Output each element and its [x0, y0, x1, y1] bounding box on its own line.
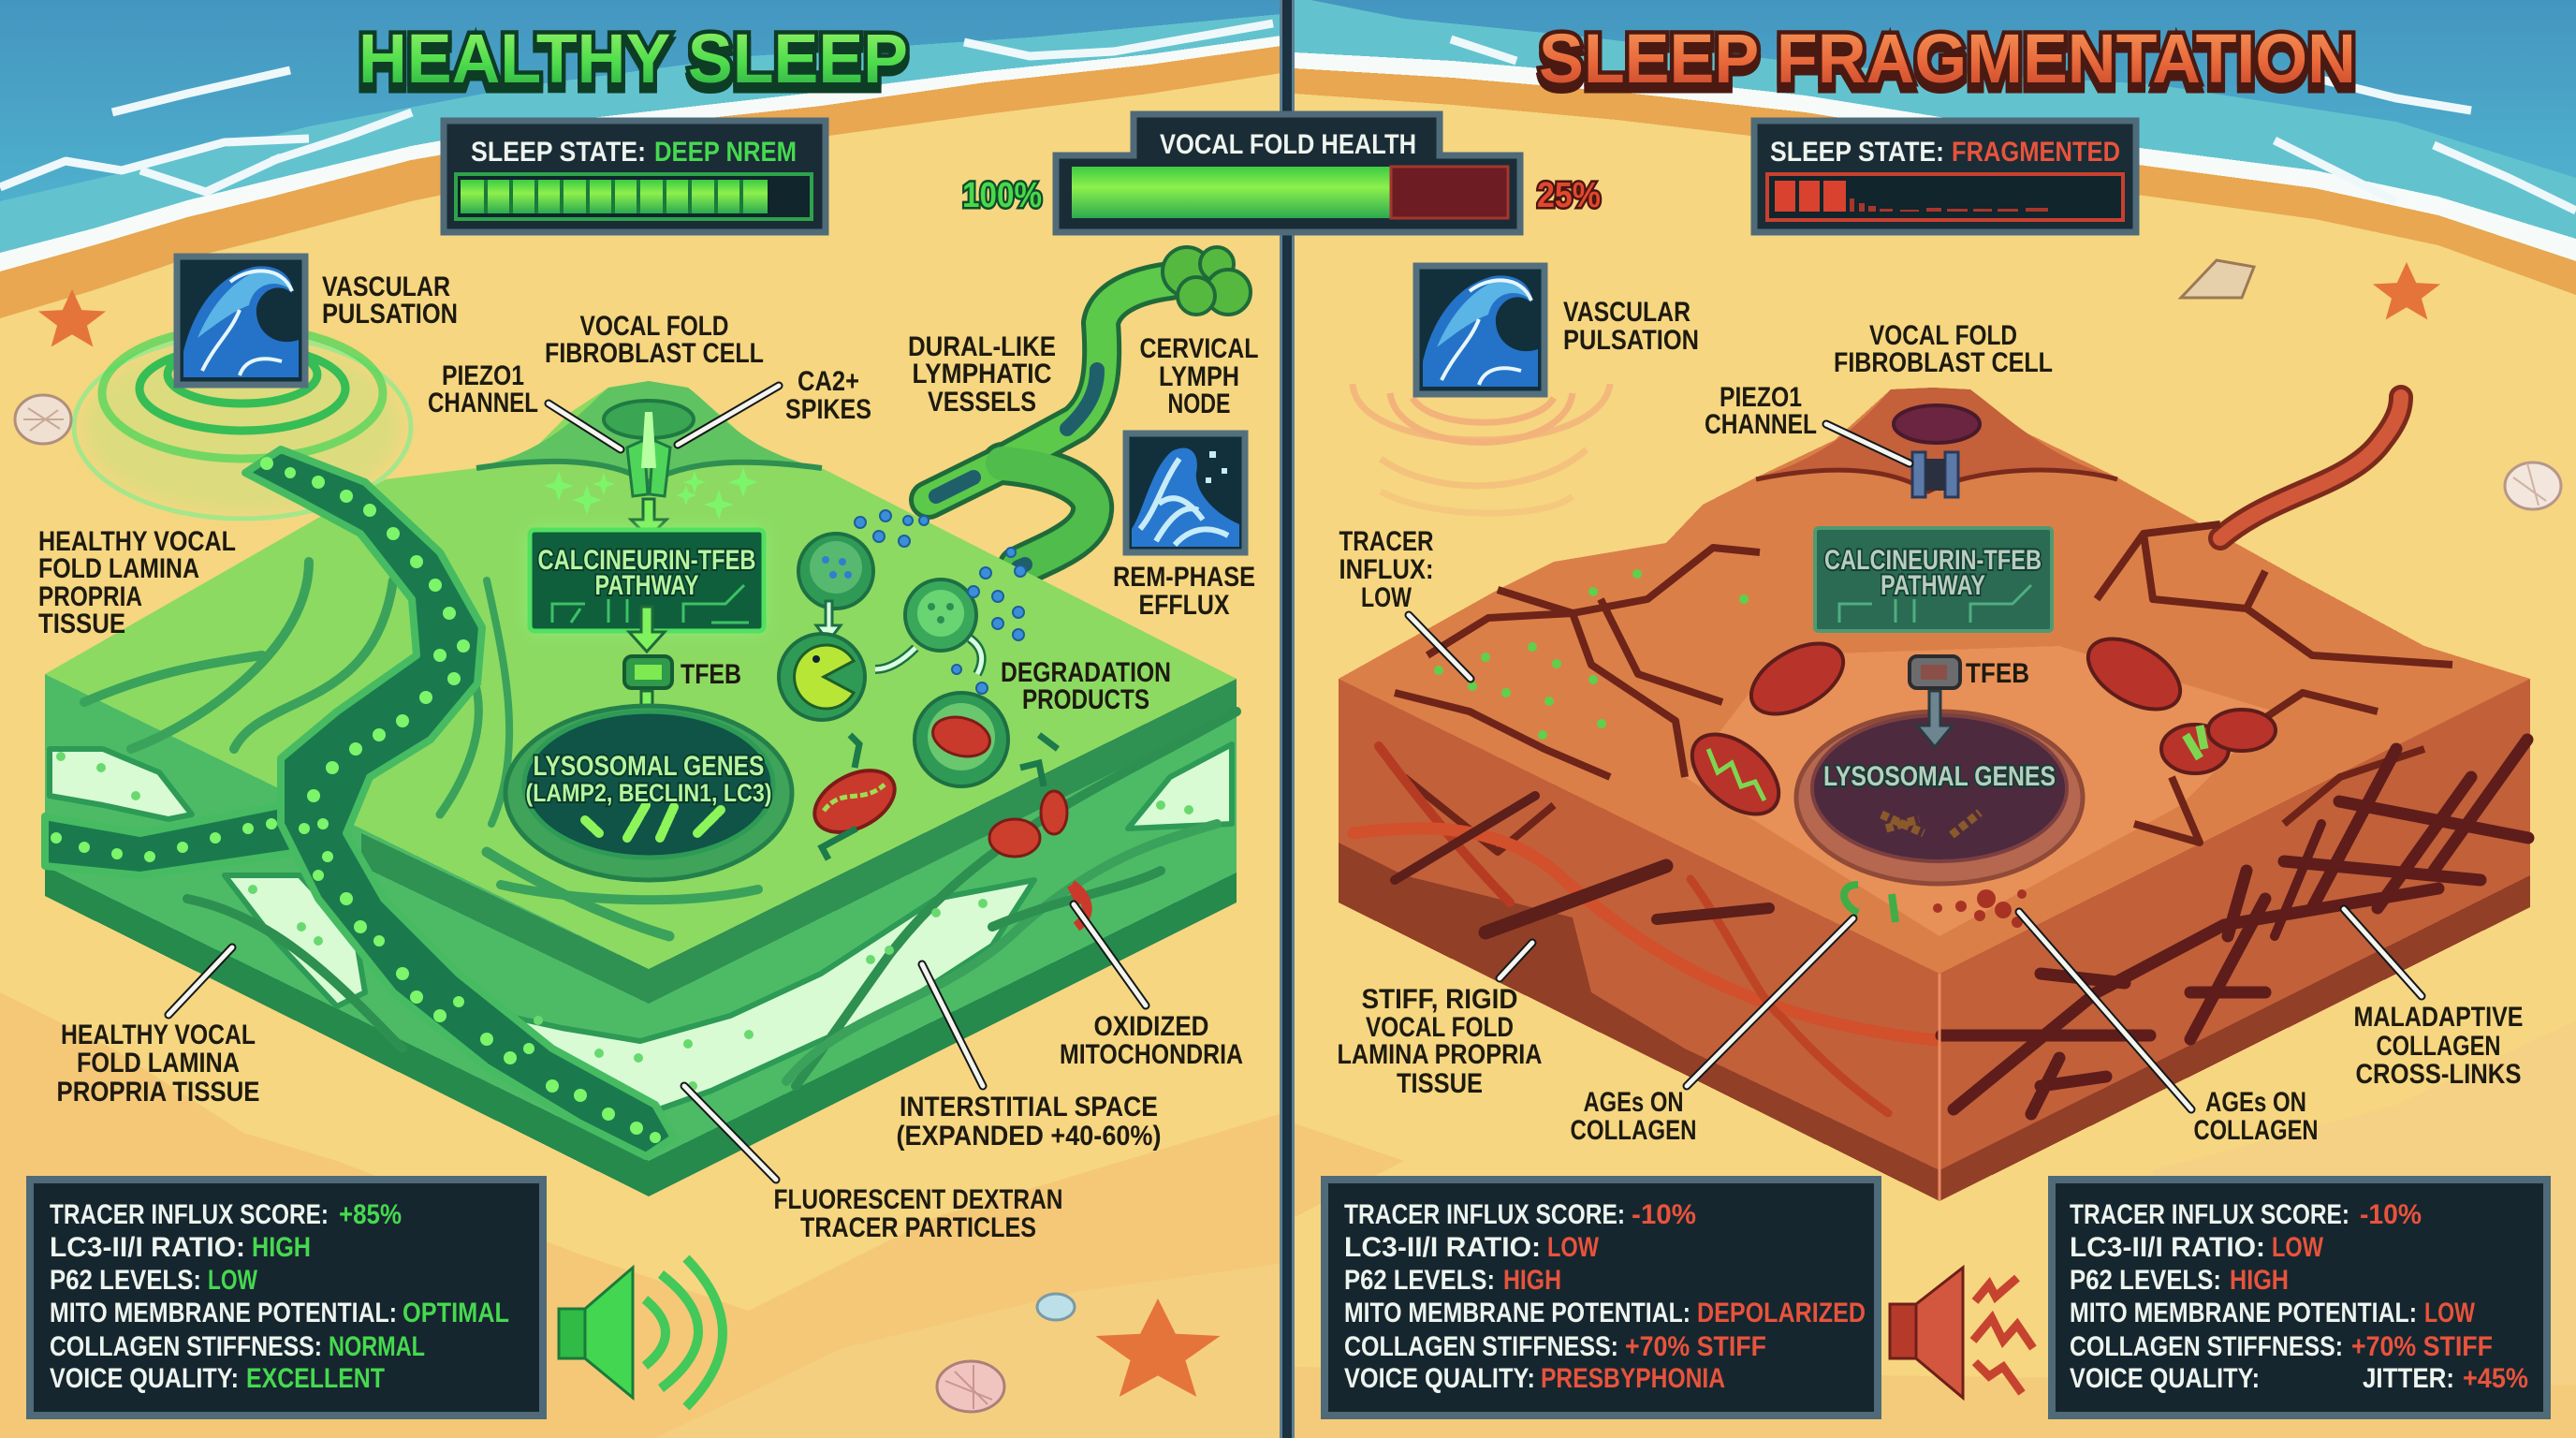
label: degradation products	[1001, 657, 1171, 715]
lysosome nucleus healthy	[505, 706, 792, 880]
label: interstitial space: INTERSTITIAL SPACE	[900, 1092, 1158, 1123]
label: vascular pulsation healthy: VASCULAR	[322, 271, 450, 302]
leader lines healthy	[168, 386, 1146, 1180]
background: ocean foam streaks left	[0, 23, 1273, 192]
label: cervical lymph node: LYMPH	[1159, 361, 1239, 392]
label: healthy vocal fold lamina propria tissue lower: HEALTHY VOCAL	[61, 1020, 256, 1050]
ca2+ sparkles	[544, 467, 758, 520]
interstitial lagoon bottom	[50, 744, 1232, 1114]
stat: voice quality and jitter: VOICE QUALITY:	[2070, 1363, 2260, 1394]
wave shape	[183, 266, 299, 377]
label: ages on collagen left: AGEs ON	[1584, 1087, 1683, 1118]
label: pathway: PATHWAY	[1881, 570, 1985, 601]
leader lines fragmented	[1409, 424, 2422, 1109]
label: piezo1 channel healthy: CHANNEL	[428, 388, 538, 418]
fibroblast nucleus	[604, 401, 694, 438]
stat: tracer influx: +85%	[339, 1199, 402, 1230]
pacman lysosome	[779, 634, 865, 720]
label: stiff rigid tissue: STIFF, RIGID	[1361, 984, 1518, 1015]
autophagy vesicle 2	[905, 580, 976, 651]
stat: lc3 ratio: LC3-II/I RATIO:	[1344, 1232, 1541, 1263]
surface cracks	[1395, 524, 2452, 852]
label: lysosomal genes fragmented: LYSOSOMAL GENES	[1823, 761, 2056, 792]
stat: mito membrane potential: MITO MEMBRANE POTENTIAL:	[2070, 1298, 2417, 1328]
cervical lymph node	[1163, 247, 1251, 315]
health bar	[1072, 167, 1508, 218]
ripple rings: fragmented vascular pulsation	[1353, 384, 1610, 513]
label: fluorescent dextran tracer particles	[773, 1184, 1063, 1243]
circuit traces	[552, 585, 749, 623]
label: cervical lymph node	[1140, 333, 1258, 419]
panel: sleep state healthy	[444, 121, 826, 232]
slab: fragmented tissue block	[1339, 388, 2530, 1201]
title: sleep fragmentation: SLEEP FRAGMENTATION	[1539, 20, 2356, 97]
oxidized mitochondria in wall	[1072, 885, 1087, 927]
label: rem-phase efflux: REM-PHASE	[1113, 562, 1255, 593]
label: vocal fold fibroblast cell fragmented: VOCAL FOLD	[1869, 320, 2017, 351]
stat: voice quality: PRESBYPHONIA	[1541, 1363, 1725, 1394]
panel: vocal fold health	[1056, 114, 1520, 232]
background: lower sand patches	[0, 992, 2576, 1438]
arrow: channel to pathway	[631, 499, 666, 537]
tissue fibers	[84, 562, 1237, 1086]
label: maladaptive collagen cross-links: MALADAPTIVE	[2353, 1002, 2524, 1033]
stat: collagen stiffness: COLLAGEN STIFFNESS:	[1344, 1331, 1618, 1362]
drying vessel inner	[2220, 397, 2401, 538]
icon: wave vascular pulsation healthy	[177, 257, 305, 385]
icon: speaker healthy	[559, 1258, 723, 1407]
label: tracer influx low: INFLUX:	[1339, 554, 1434, 585]
label: vascular pulsation fragmented	[1563, 297, 1699, 356]
label: fluorescent dextran tracer particles: FLUORESCENT DEXTRAN	[773, 1184, 1063, 1215]
wave shape	[1132, 448, 1239, 547]
surface lighter front plate	[1685, 646, 2275, 936]
text: sleep state fragmented: SLEEP STATE:	[1770, 137, 1944, 168]
label: tracer influx low: LOW	[1361, 582, 1412, 613]
damaged mitochondria	[1677, 624, 2276, 829]
label: piezo1 channel fragmented	[1705, 382, 1817, 440]
label: stiff rigid tissue: TISSUE	[1397, 1068, 1483, 1099]
drying vessel	[2220, 397, 2401, 538]
distorted sound waves	[1973, 1278, 2033, 1393]
value: 100%: 100%	[962, 176, 1042, 215]
label: dural-like lymphatic vessels: DURAL-LIKE	[908, 331, 1056, 362]
text: sleep state deep nrem: DEEP NREM	[654, 137, 797, 168]
text: sleep state deep nrem: SLEEP STATE:	[471, 137, 646, 168]
top surface	[1339, 388, 2530, 974]
autophagosome tethers	[822, 735, 1058, 859]
label: maladaptive collagen cross-links: CROSS-LINKS	[2355, 1059, 2522, 1090]
label: pathway: PATHWAY	[595, 570, 698, 601]
wave shape	[1423, 275, 1538, 387]
label: ages on collagen right	[2194, 1087, 2318, 1146]
lagoon tracer dots	[56, 752, 1193, 1091]
label: healthy vocal fold lamina propria tissue lower: PROPRIA TISSUE	[56, 1077, 260, 1108]
decoration: starfish right	[2373, 262, 2440, 320]
ages green squiggles	[1844, 885, 1895, 922]
label: stiff rigid tissue: VOCAL FOLD	[1366, 1012, 1514, 1043]
autophagy vesicle 1	[798, 534, 873, 609]
icon: tfeb pill	[624, 656, 672, 688]
damaged mitochondria small	[989, 791, 1067, 857]
stat: collagen stiffness: NORMAL	[329, 1331, 425, 1362]
stat: mito membrane potential: OPTIMAL	[402, 1298, 509, 1328]
wave highlight	[1437, 281, 1530, 347]
label: ca2+ spikes: SPIKES	[785, 394, 871, 425]
stat: collagen stiffness: COLLAGEN STIFFNESS:	[50, 1331, 322, 1362]
label: healthy vocal fold lamina propria tissue upper: TISSUE	[38, 609, 125, 639]
label: tfeb healthy: TFEB	[681, 659, 741, 690]
ages red debris	[1933, 889, 2027, 928]
label: vocal fold fibroblast cell healthy	[545, 311, 764, 369]
label: vascular pulsation healthy	[322, 271, 458, 330]
label: vascular pulsation fragmented: PULSATION	[1563, 325, 1699, 356]
mitochondrion cristae	[1708, 749, 1764, 800]
stat: p62 levels: HIGH	[1503, 1265, 1561, 1296]
top surface	[45, 381, 1237, 969]
sparse tracer dots	[1434, 569, 1749, 740]
vessel lumen segments	[936, 370, 1097, 567]
stat: p62 levels: P62 LEVELS:	[2070, 1265, 2221, 1296]
stat: tracer influx: TRACER INFLUX SCORE:	[1344, 1199, 1625, 1230]
membrane line	[1756, 470, 2117, 492]
label: oxidized mitochondria: MITOCHONDRIA	[1060, 1039, 1243, 1070]
blue degradation particles	[855, 510, 1026, 694]
label: interstitial space: (EXPANDED +40-60%)	[897, 1121, 1161, 1152]
slab side walls	[1339, 679, 2530, 1201]
text: vocal fold health: VOCAL FOLD HEALTH	[1160, 129, 1416, 160]
stat: voice quality: EXCELLENT	[246, 1363, 385, 1394]
stat: voice quality: VOICE QUALITY:	[50, 1363, 239, 1394]
stat: lc3 ratio: LOW	[2272, 1232, 2324, 1263]
fibroblast hill	[1756, 388, 2117, 492]
arrow: tfeb to lysosomal genes	[629, 691, 665, 747]
label: degradation products: PRODUCTS	[1022, 684, 1149, 715]
label: dural-like lymphatic vessels: VESSELS	[928, 387, 1036, 418]
panel: fragmented stats 1	[1325, 1180, 1878, 1416]
label: vocal fold fibroblast cell healthy: FIBROBLAST CELL	[545, 338, 764, 369]
label: fluorescent dextran tracer particles: TRACER PARTICLES	[800, 1212, 1036, 1243]
side dark band	[361, 679, 1237, 1004]
piezo1 channel open	[627, 412, 670, 496]
wave foam	[202, 271, 292, 375]
fibroblast nucleus	[1894, 405, 1980, 443]
slab: healthy tissue block	[45, 381, 1237, 1196]
panel: fragmented stats 2	[2052, 1180, 2547, 1416]
ripple rings: healthy vascular pulsation	[74, 328, 411, 519]
stat: p62 levels: HIGH	[2230, 1265, 2289, 1296]
decoration: small blue shell	[1037, 1294, 1075, 1320]
gene glyphs	[585, 805, 721, 838]
decoration: starfish bottom	[1095, 1299, 1221, 1397]
label: dural-like lymphatic vessels	[908, 331, 1056, 418]
label: piezo1 channel healthy	[428, 360, 538, 418]
piezo1 channel closed	[1912, 452, 1958, 497]
decoration: pink shell bottom	[937, 1361, 1004, 1412]
label: maladaptive collagen cross-links	[2353, 1002, 2524, 1090]
stat: voice quality and jitter	[2070, 1363, 2528, 1394]
slab side walls	[45, 674, 1237, 1196]
value: 25%: 25%	[1537, 176, 1601, 215]
label: piezo1 channel fragmented: CHANNEL	[1705, 409, 1817, 440]
stat: lc3 ratio: HIGH	[252, 1232, 311, 1263]
label: healthy vocal fold lamina propria tissue lower: FOLD LAMINA	[77, 1048, 240, 1078]
label: ages on collagen right: COLLAGEN	[2194, 1115, 2318, 1146]
label: lamp2 beclin1 lc3: (LAMP2, BECLIN1, LC3)	[526, 779, 771, 807]
label: vocal fold fibroblast cell healthy: VOCAL FOLD	[580, 311, 728, 342]
stat: p62 levels: P62 LEVELS:	[50, 1265, 201, 1296]
progress bar: deep nrem	[456, 174, 812, 219]
label: rem-phase efflux	[1113, 562, 1255, 621]
decoration: starfish upper left	[38, 289, 106, 347]
stat: voice quality	[50, 1363, 385, 1394]
panel: healthy stats	[30, 1180, 543, 1416]
stat: voice quality: VOICE QUALITY:	[1344, 1363, 1535, 1394]
text: sleep state fragmented: FRAGMENTED	[1952, 137, 2120, 168]
icon: tfeb pill grey	[1910, 656, 1960, 688]
label: healthy vocal fold lamina propria tissue upper: HEALTHY VOCAL	[38, 526, 236, 557]
decoration: shell right	[2505, 462, 2561, 509]
arrow: vesicle down	[816, 601, 841, 641]
label: vocal fold fibroblast cell fragmented: FIBROBLAST CELL	[1834, 347, 2053, 378]
text: sleep state fragmented	[1770, 137, 2120, 168]
stat: p62 levels: LOW	[208, 1265, 258, 1296]
label: healthy vocal fold lamina propria tissue lower	[56, 1020, 260, 1108]
sound waves	[645, 1258, 723, 1407]
icon: wave rem-phase efflux	[1126, 433, 1245, 552]
stat: collagen stiffness: COLLAGEN STIFFNESS:	[2070, 1331, 2343, 1362]
label: healthy vocal fold lamina propria tissue upper: FOLD LAMINA	[38, 553, 199, 584]
membrane fold line	[476, 462, 822, 482]
label: interstitial space	[897, 1092, 1161, 1152]
panel: sleep state fragmented	[1754, 121, 2136, 232]
tracer particles in river	[51, 457, 661, 1143]
stat: collagen stiffness: +70% STIFF	[2351, 1331, 2493, 1362]
slab lower band	[1339, 843, 2530, 1201]
gene debris	[1881, 813, 1980, 835]
maladaptive collagen cross-links	[1941, 740, 2528, 1114]
background: ocean foam streaks right	[1451, 39, 2576, 211]
wave foam	[1442, 280, 1531, 385]
slab centre edge	[1938, 974, 1941, 1201]
stat: voice quality	[1344, 1363, 1725, 1394]
icon: wave vascular pulsation fragmented	[1416, 266, 1544, 394]
stat: tracer influx: TRACER INFLUX SCORE:	[2070, 1199, 2349, 1230]
text: sleep state deep nrem	[471, 137, 797, 168]
panel: calcineurin-tfeb pathway fragmented	[1815, 528, 2052, 631]
label: cervical lymph node: CERVICAL	[1140, 333, 1258, 364]
stat: mito membrane potential: LOW	[2424, 1298, 2476, 1328]
stat: lc3 ratio: LC3-II/I RATIO:	[2070, 1232, 2265, 1263]
label: stiff rigid tissue	[1337, 984, 1543, 1099]
label: tracer influx low: TRACER	[1339, 526, 1434, 557]
progress bar: fragmented	[1767, 174, 2123, 220]
stat: tracer influx: TRACER INFLUX SCORE:	[50, 1199, 329, 1230]
label: degradation products: DEGRADATION	[1001, 657, 1171, 688]
fibroblast hill	[476, 381, 822, 479]
label: tracer influx low	[1339, 526, 1434, 613]
label: oxidized mitochondria: OXIDIZED	[1093, 1011, 1209, 1042]
label: vocal fold fibroblast cell fragmented	[1834, 320, 2053, 378]
label: dural-like lymphatic vessels: LYMPHATIC	[912, 359, 1052, 389]
arrow: pathway to tfeb	[629, 607, 665, 652]
label: piezo1 channel fragmented: PIEZO1	[1720, 382, 1802, 413]
label: ages on collagen right: AGEs ON	[2205, 1087, 2306, 1118]
arrows: recycling	[875, 638, 982, 674]
label: tfeb fragmented: TFEB	[1966, 658, 2029, 689]
decoration: shell upper left	[15, 395, 71, 444]
centre divider	[1280, 0, 1295, 1438]
stat: collagen stiffness: +70% STIFF	[1625, 1331, 1766, 1362]
label: rem-phase efflux: EFFLUX	[1138, 590, 1230, 621]
mitophagy vesicle	[915, 693, 1008, 786]
background: ocean right	[1295, 0, 2576, 295]
background: ocean left	[0, 0, 1281, 318]
green marker in mito	[2186, 726, 2204, 758]
glymphatic river	[45, 449, 674, 1156]
label: cervical lymph node: NODE	[1168, 389, 1230, 419]
arrow: tfeb to genes grey	[1917, 691, 1953, 747]
oxidized mitochondrion	[804, 758, 905, 844]
label: healthy vocal fold lamina propria tissue upper: PROPRIA	[38, 581, 142, 612]
label: healthy vocal fold lamina propria tissue upper	[38, 526, 236, 639]
stat: mito membrane potential: MITO MEMBRANE POTENTIAL:	[50, 1298, 397, 1328]
label: ages on collagen left: COLLAGEN	[1571, 1115, 1696, 1146]
stat: mito membrane potential: MITO MEMBRANE POTENTIAL:	[1344, 1298, 1690, 1328]
label: maladaptive collagen cross-links: COLLAGEN	[2376, 1031, 2501, 1062]
label: calcineurin pathway: CALCINEURIN-TFEB	[1824, 545, 2042, 576]
title: healthy sleep: HEALTHY SLEEP	[359, 20, 908, 97]
stat: tracer influx: -10%	[1632, 1199, 1696, 1230]
lymphatic vessels healthy	[929, 247, 1251, 567]
wave highlight	[1140, 459, 1228, 545]
label: ages on collagen left	[1571, 1087, 1696, 1146]
icon: speaker fragmented	[1890, 1268, 2033, 1398]
stat: voice quality and jitter: JITTER:	[2363, 1363, 2454, 1394]
decoration: conch shell right	[2181, 260, 2254, 298]
label: piezo1 channel healthy: PIEZO1	[442, 360, 524, 391]
stat: voice quality and jitter: +45%	[2463, 1363, 2528, 1394]
stat: p62 levels: P62 LEVELS:	[1344, 1265, 1495, 1296]
label: lysosomal genes healthy: LYSOSOMAL GENES	[534, 751, 764, 782]
stat: tracer influx: -10%	[2360, 1199, 2422, 1230]
stat: lc3 ratio: LC3-II/I RATIO:	[50, 1232, 245, 1263]
lysosome nucleus fragmented	[1796, 712, 2083, 884]
spray dots	[1206, 451, 1227, 483]
stat: mito membrane potential: DEPOLARIZED	[1697, 1298, 1866, 1328]
stat: lc3 ratio: LOW	[1547, 1232, 1600, 1263]
label: ca2+ spikes: CA2+	[798, 366, 859, 397]
circuit traces	[1839, 585, 2031, 623]
label: oxidized mitochondria	[1060, 1011, 1243, 1070]
wave highlight	[198, 271, 290, 338]
slab bottom band	[45, 866, 1237, 1196]
label: calcineurin pathway: CALCINEURIN-TFEB	[537, 545, 756, 576]
panel: calcineurin-tfeb pathway healthy	[530, 530, 764, 631]
label: vascular pulsation fragmented: VASCULAR	[1563, 297, 1690, 328]
left wall fibers	[1354, 746, 1937, 1113]
label: vascular pulsation healthy: PULSATION	[322, 299, 458, 330]
label: ca2+ spikes	[785, 366, 871, 425]
label: stiff rigid tissue: LAMINA PROPRIA	[1337, 1039, 1543, 1070]
